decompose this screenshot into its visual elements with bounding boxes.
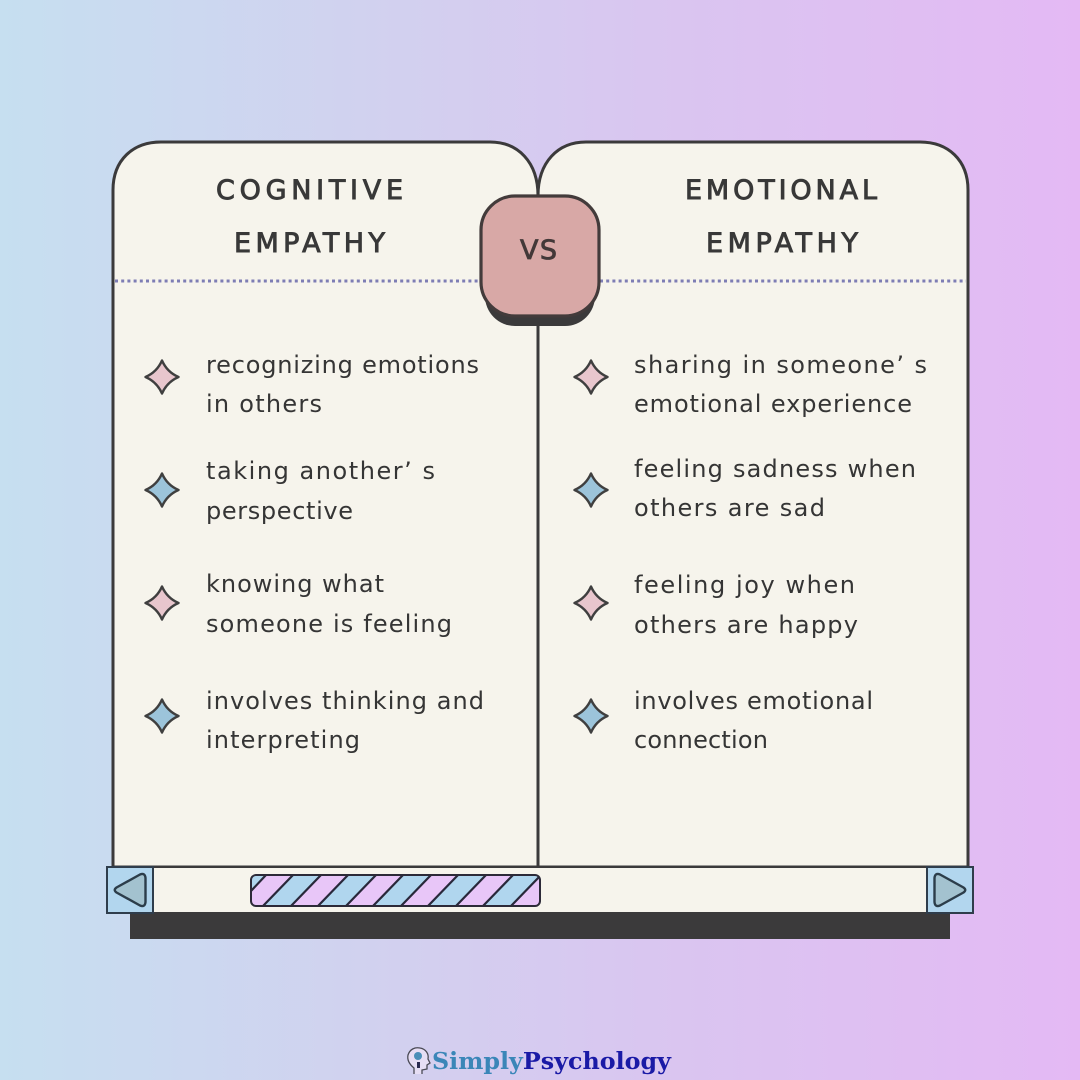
item: thinking and interpreting: interpreting [206,726,360,754]
heading: cognitive empathy: EMPATHY [234,228,386,259]
panel: emotional empathy [538,142,968,867]
item: emotional connection: involves emotional [634,687,873,715]
icon: pink star [146,360,178,394]
item: feeling joy: others are happy [634,611,858,639]
icon: blue star [146,474,178,506]
heading: emotional empathy: EMPATHY [706,228,858,259]
right arrow button [927,867,973,913]
item: feeling sadness: others are sad [634,494,825,522]
item: feeling joy [634,571,858,639]
item: knowing what someone is feeling: knowing what [206,570,384,598]
left arrow button [107,867,153,913]
wordmark: SimplyPsychology [432,1048,672,1075]
heading: emotional empathy [685,175,877,259]
scrollbar [107,867,973,913]
item: recognizing emotions [206,351,479,418]
item: sharing emotional experience: emotional experience [634,390,912,418]
item: feeling sadness [634,455,916,522]
item: recognizing emotions: recognizing emotions [206,351,479,379]
item: feeling joy: feeling joy when [634,571,855,599]
item: feeling sadness: feeling sadness when [634,455,916,483]
icon: blue star [146,700,178,732]
heading: emotional empathy: EMOTIONAL [685,175,877,206]
item: knowing what someone is feeling [206,570,452,638]
icon: pink star [574,360,608,394]
heading: cognitive empathy: COGNITIVE [216,175,403,206]
item: knowing what someone is feeling: someone is feeling [206,610,452,638]
item: another's perspective: taking another’ s [206,457,435,485]
item: another's perspective [206,457,435,525]
item: sharing emotional experience: sharing in someone’ s [634,351,927,379]
item: emotional connection [634,687,873,754]
scrollbar thumb [236,875,545,906]
item: thinking and interpreting [206,687,484,754]
badge shadow [485,230,595,326]
item: recognizing emotions: in others [206,390,322,418]
VS label: VS [520,235,557,266]
item: emotional connection: connection [634,726,768,754]
VS badge [481,196,599,326]
item: another's perspective: perspective [206,497,353,525]
icon: head with gear [408,1048,430,1074]
heading: cognitive empathy [216,175,403,259]
logo: Simply Psychology [408,1048,672,1075]
right panel shape [538,142,968,867]
item: sharing emotional experience [634,351,927,418]
icon: blue star [574,474,608,506]
item: thinking and interpreting: involves thinking and [206,687,484,715]
icon: blue star [574,700,608,732]
left panel shape [113,142,538,867]
right panel divider [600,280,966,282]
panel: cognitive empathy [113,142,538,867]
icon: pink star [146,586,178,620]
bottom bar shadow [130,913,950,939]
scrollbar track [153,867,927,913]
left panel divider [115,280,480,282]
icon: pink star [574,586,608,620]
badge face [481,196,599,316]
